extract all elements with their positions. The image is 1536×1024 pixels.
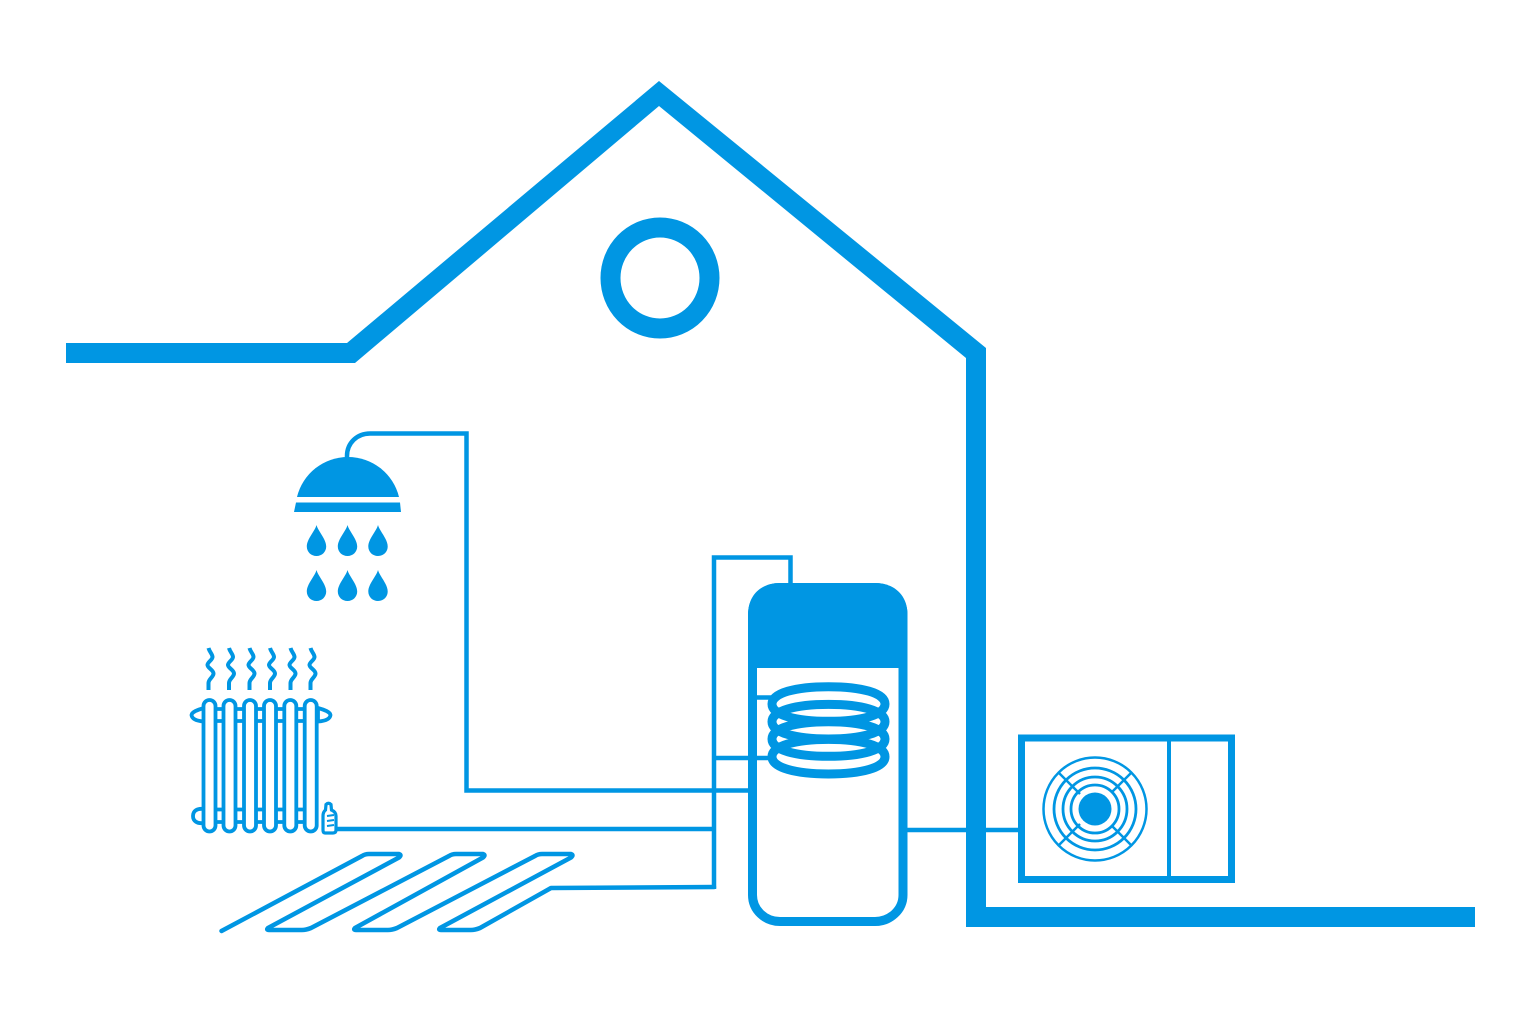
- round attic window: [610, 228, 710, 328]
- house outline and ground: [66, 81, 1475, 927]
- hot water storage tank: [748, 583, 908, 922]
- unit divider: [1167, 738, 1171, 880]
- pipe: radiator feed: [334, 827, 714, 831]
- pipe: tank loop frame: [714, 558, 790, 889]
- radiator connectors and end caps: [192, 708, 330, 823]
- shower dome: [297, 457, 399, 497]
- pipe: shower supply: [347, 434, 749, 790]
- unit casing: [1022, 738, 1232, 880]
- outdoor heat pump unit: [1022, 738, 1232, 880]
- icon: radiator with rising heat: [192, 648, 336, 833]
- pipe: coil connections inside tank: [756, 698, 776, 758]
- heat waves: [208, 648, 316, 690]
- radiator valve: [323, 803, 336, 833]
- underfloor heating coil: [222, 854, 714, 931]
- shower rim: [294, 502, 401, 512]
- icon: fan: [1044, 758, 1146, 860]
- pipe: coil lower connection outside tank: [714, 756, 749, 760]
- tank insulated top: [748, 583, 908, 668]
- water droplets: [307, 525, 388, 601]
- radiator columns: [204, 700, 317, 832]
- icon: shower head with droplets: [294, 457, 401, 601]
- heat exchanger coil: [772, 687, 885, 774]
- pipe: heat pump link: [907, 828, 1020, 832]
- tank body: [752, 588, 903, 922]
- pipes: hot water, heating circuits and heat pump link: [334, 434, 1020, 889]
